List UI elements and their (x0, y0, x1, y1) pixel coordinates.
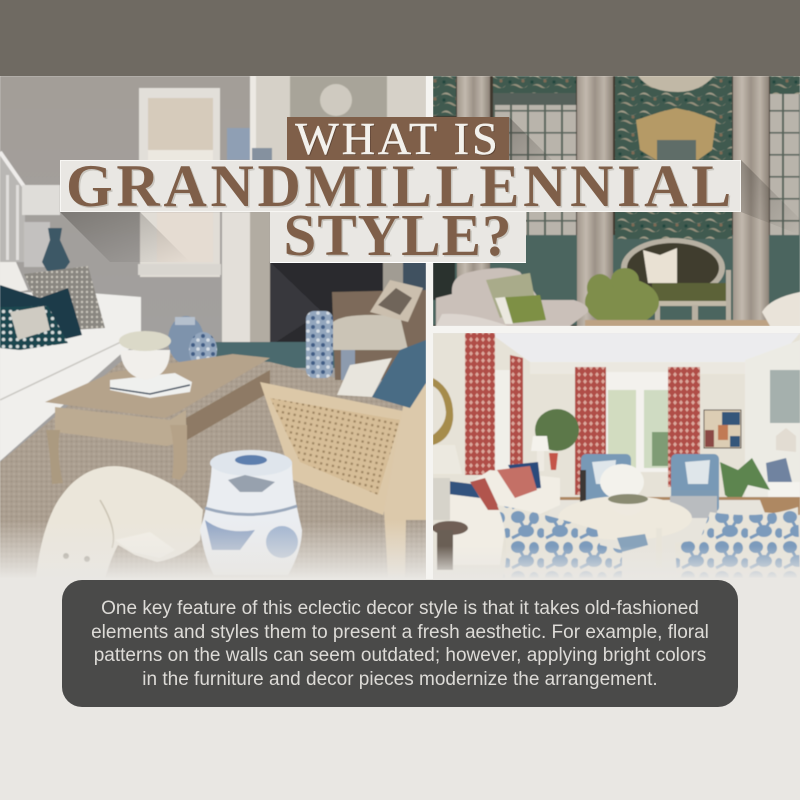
white armchair at edge (762, 292, 800, 326)
abstract art (704, 410, 741, 448)
title line: what is: WHAT IS (295, 112, 501, 164)
shiplap wall and mirror (249, 76, 426, 160)
ginger jar and tray (168, 316, 218, 362)
floor and rug (520, 497, 800, 578)
built-in shelf (745, 340, 800, 506)
staircase (0, 152, 60, 267)
green panelled wainscot (433, 235, 800, 325)
description text panel: elements and styles them to present a fresh aesthetic. For example, floral (91, 622, 709, 643)
curtains (457, 76, 769, 326)
lower window and door panel (138, 212, 270, 346)
white sofa (0, 292, 141, 461)
sofa pillows (0, 262, 105, 350)
armchair by the fireplace (306, 280, 426, 380)
books and white bowl (110, 331, 192, 398)
window with garden view (606, 372, 670, 472)
title line: style: STYLE? (284, 202, 512, 268)
dog eyes (63, 553, 90, 562)
rattan accent chair (260, 340, 426, 578)
red patterned curtains (465, 333, 700, 495)
ceiling (490, 333, 800, 362)
photo: green wallpaper room with settee (433, 76, 800, 326)
white sofa with pillows (448, 462, 560, 565)
potted plant (585, 268, 659, 326)
long diagonal shadows behind title (60, 117, 800, 262)
blue floral armchair right (675, 507, 800, 578)
left window (494, 370, 510, 470)
tile floor (215, 341, 336, 368)
photo: bright room with red curtains (432, 333, 800, 579)
photo gutters (426, 76, 800, 579)
chandelier (638, 76, 714, 92)
photo: living room with rattan chair (0, 76, 426, 578)
description text panel: One key feature of this eclectic decor style is that it takes old-fashioned (101, 598, 699, 619)
plant and lamp (531, 409, 579, 471)
photo bottom fades (0, 520, 800, 579)
description text panel: in the furniture and decor pieces modernize the arrangement. (142, 669, 658, 690)
oval back settee (621, 238, 731, 326)
floor (585, 320, 800, 326)
blue floral armchair left (497, 505, 622, 578)
gilded mirror (636, 108, 716, 161)
top band (0, 0, 800, 76)
description text panel (62, 580, 738, 707)
tall windows (433, 76, 800, 235)
blue accent chair right (670, 454, 719, 518)
round gold mirror (433, 378, 453, 445)
blue and white floor vase (42, 228, 70, 276)
white flower bowl (600, 464, 650, 516)
dog (36, 466, 203, 578)
ginger jars on mantel (227, 128, 272, 162)
garden stool (200, 450, 302, 575)
table lamp and side table (432, 445, 468, 570)
cream sofa with green pillow (436, 268, 588, 326)
fireplace (270, 262, 426, 346)
description text panel: patterns on the walls can seem outdated; however, applying bright colors (94, 645, 706, 666)
round coffee table (558, 496, 692, 568)
title line: grandmillennial: GRANDMILLENNIAL (66, 152, 735, 218)
wallpaper panel (615, 76, 732, 239)
jute rug (0, 350, 426, 578)
blue accent chair left (580, 454, 631, 516)
artwork: top band and three interior photos (0, 0, 800, 579)
coffee table (45, 354, 270, 484)
title heading (60, 112, 741, 268)
fern (720, 458, 770, 505)
upper window with roman shade (139, 88, 220, 164)
